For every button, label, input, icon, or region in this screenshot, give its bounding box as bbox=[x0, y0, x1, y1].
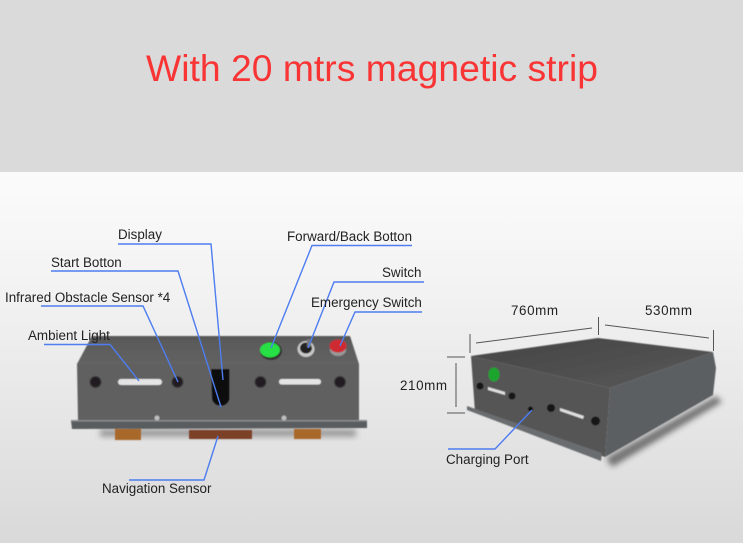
wheel right bbox=[294, 429, 321, 439]
top banner background bbox=[0, 0, 743, 172]
navigation sensor board bbox=[189, 430, 252, 439]
label: emergency switch: Emergency Switch bbox=[311, 295, 422, 310]
label: charging port: Charging Port bbox=[446, 452, 529, 467]
green button bbox=[488, 368, 500, 382]
feature labels bbox=[5, 227, 529, 496]
top face bbox=[471, 338, 713, 388]
label: forward/back button: Forward/Back Botton bbox=[287, 229, 412, 244]
line: infrared sensor bbox=[41, 306, 178, 382]
ambient light strips bbox=[118, 379, 321, 385]
emergency switch bbox=[330, 340, 346, 356]
label: display: Display bbox=[118, 227, 162, 242]
wheel left bbox=[115, 429, 141, 440]
dimension: 530mm: 530mm bbox=[645, 303, 693, 318]
start button bbox=[218, 405, 222, 409]
dimension: 760mm: 760mm bbox=[511, 303, 559, 318]
callout lines bbox=[41, 244, 532, 480]
infrared sensors bbox=[90, 376, 346, 388]
line: emergency bbox=[340, 312, 422, 346]
label: start button: Start Botton bbox=[51, 255, 122, 270]
line: charging port bbox=[448, 410, 532, 449]
3/4 view device bbox=[467, 338, 722, 467]
shadow bbox=[606, 396, 722, 467]
line: start button bbox=[51, 271, 221, 407]
front face bbox=[471, 356, 610, 457]
label: switch: Switch bbox=[382, 265, 421, 280]
line: display bbox=[118, 244, 223, 380]
sensors bbox=[476, 382, 600, 426]
dimension: 210mm: 210mm bbox=[400, 378, 448, 393]
label: infrared sensor: Infrared Obstacle Sensor *4 bbox=[5, 290, 171, 305]
title: With 20 mtrs magnetic strip bbox=[146, 48, 598, 89]
side face bbox=[605, 352, 716, 457]
charging port bbox=[528, 406, 533, 412]
front face bbox=[77, 364, 359, 420]
flange bbox=[71, 421, 367, 429]
front view device bbox=[71, 336, 367, 440]
label: navigation sensor: Navigation Sensor bbox=[102, 481, 212, 496]
line: switch bbox=[308, 282, 424, 348]
dimension lines bbox=[447, 317, 714, 413]
line: ambient light bbox=[44, 344, 139, 381]
line: navigation sensor bbox=[129, 436, 218, 480]
top face bbox=[77, 336, 359, 364]
green button bbox=[260, 342, 282, 360]
toggle switch bbox=[298, 339, 314, 357]
screws bbox=[154, 416, 286, 420]
line: forward button bbox=[271, 246, 412, 348]
flange bbox=[467, 406, 602, 461]
light strips bbox=[488, 387, 584, 419]
lower background bbox=[0, 172, 743, 543]
display slot bbox=[211, 369, 230, 406]
dimension labels bbox=[400, 303, 693, 393]
device shadow bbox=[100, 429, 356, 437]
label: ambient light: Ambient Light bbox=[28, 328, 110, 343]
